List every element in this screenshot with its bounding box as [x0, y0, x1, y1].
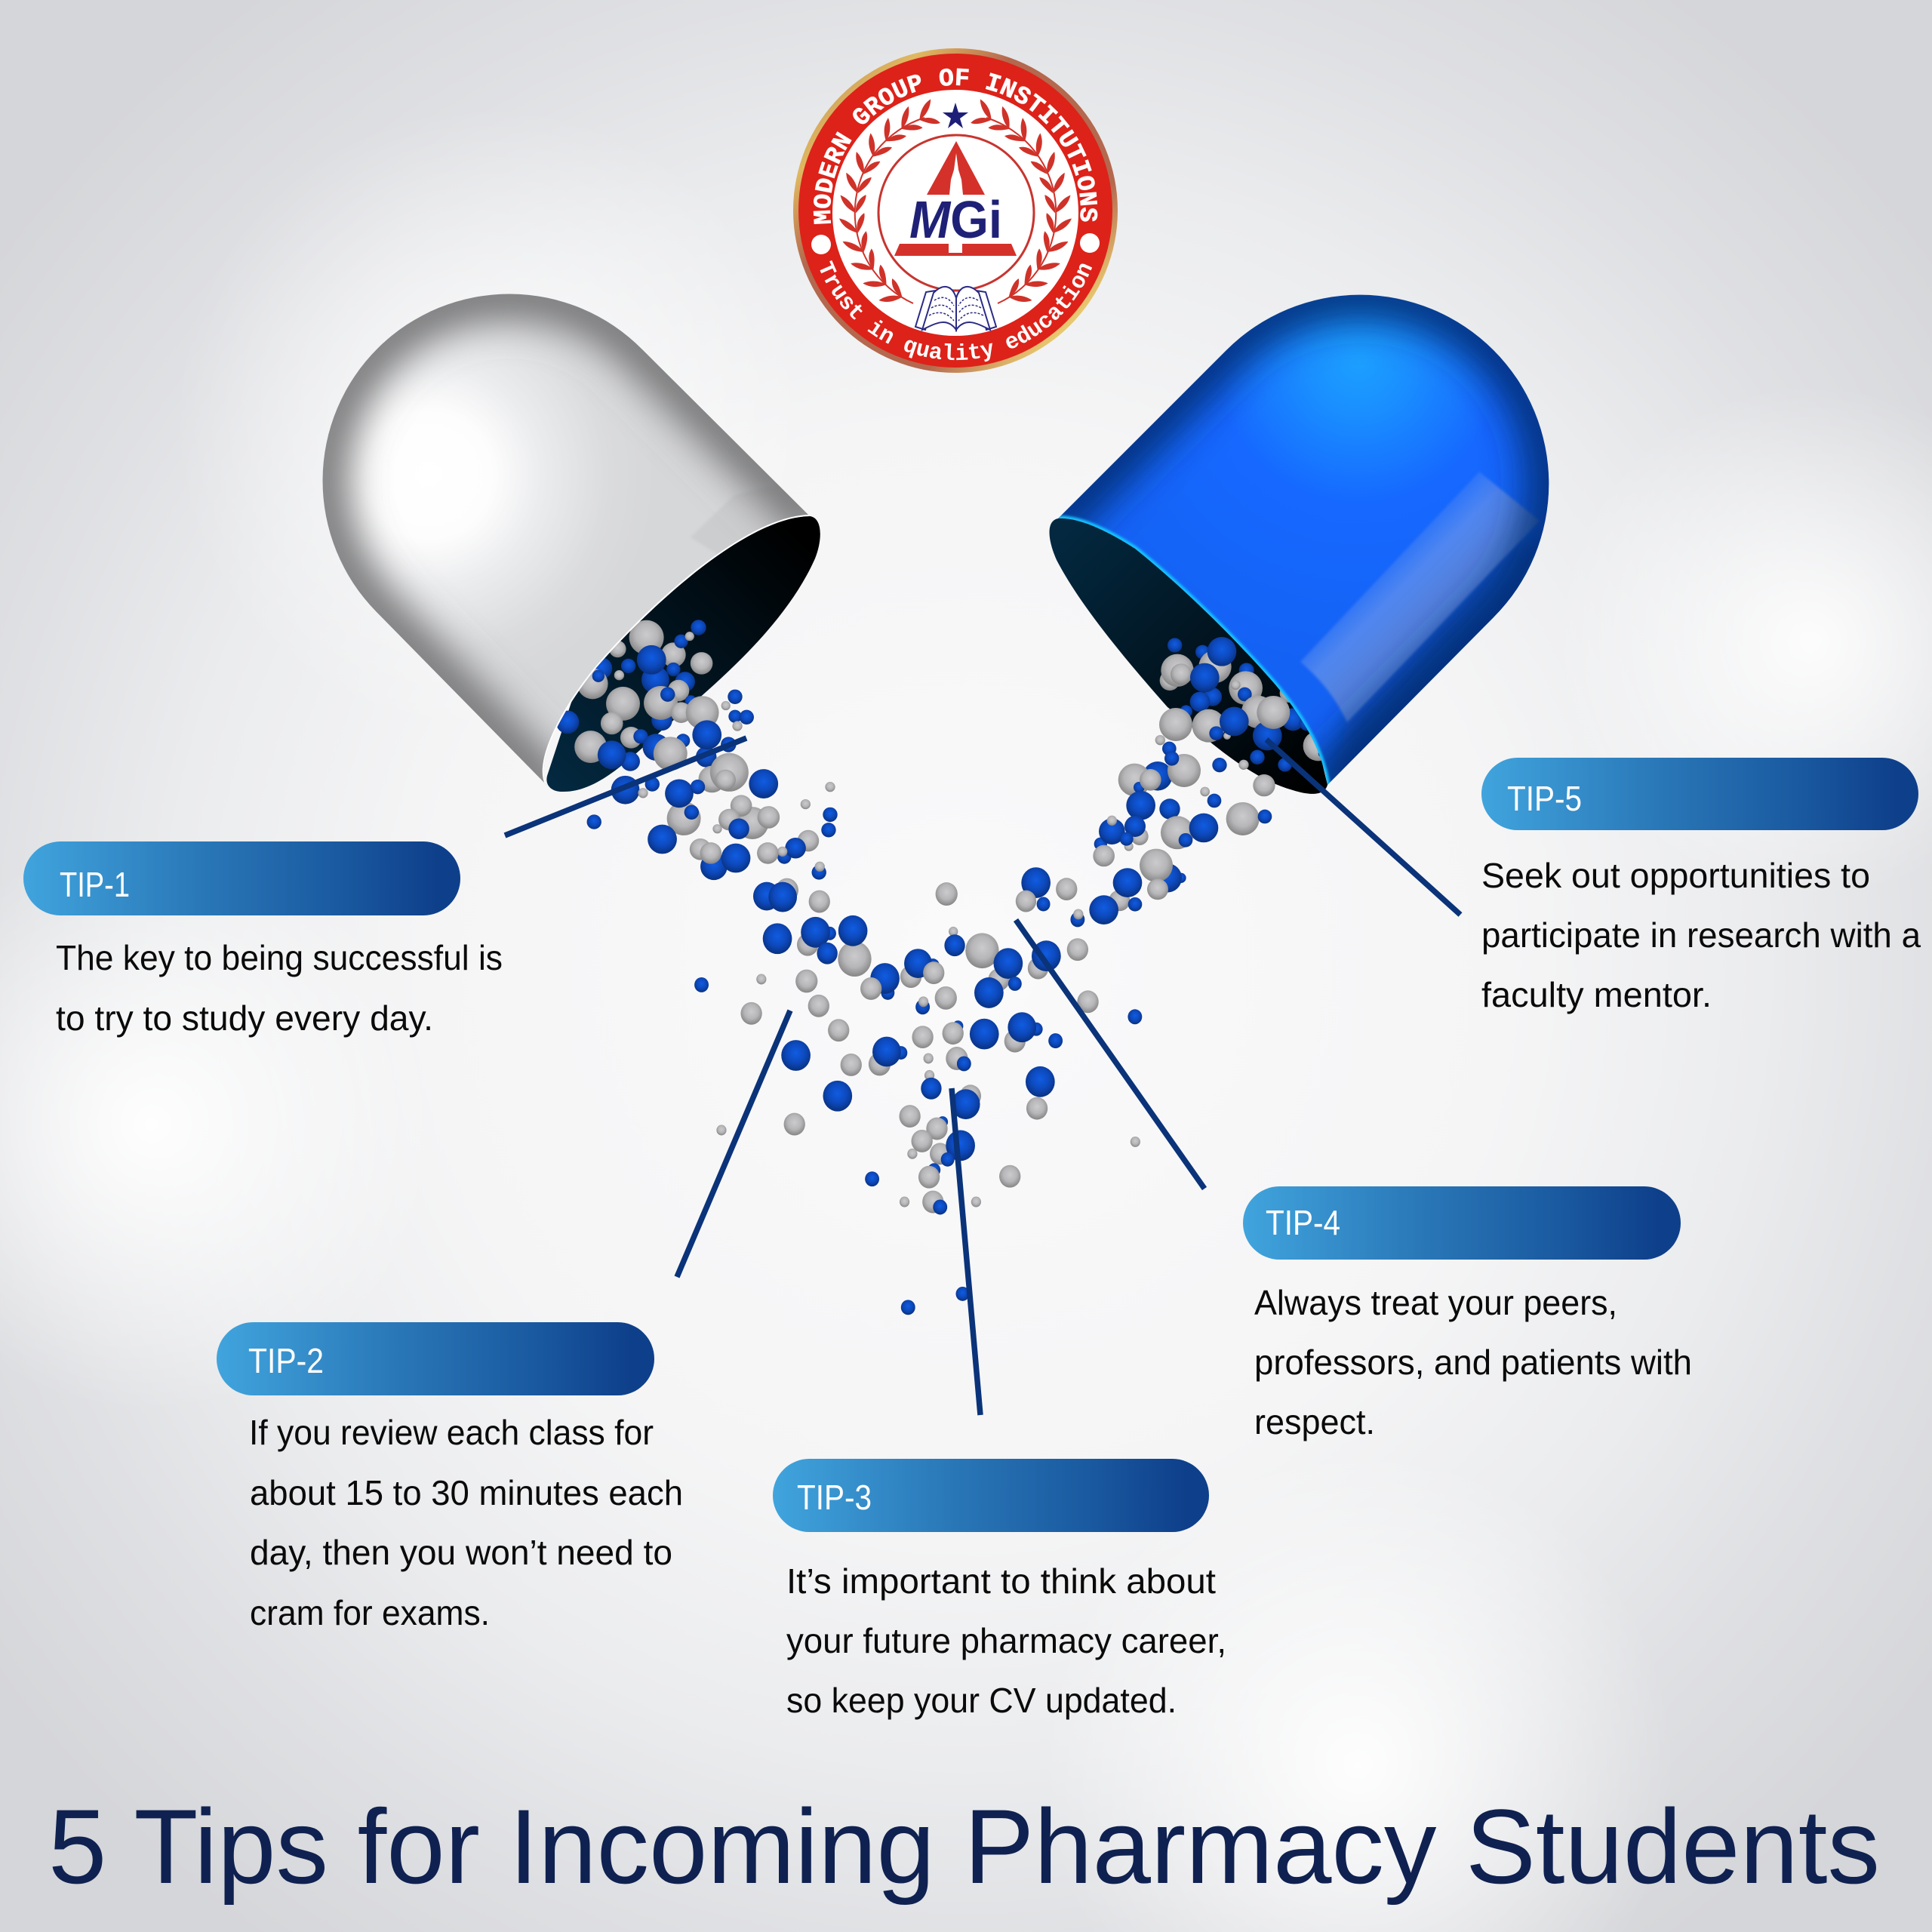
central sphere cloud	[694, 867, 1142, 1315]
logo inner circle	[878, 135, 1034, 291]
tip 5 text: participate in research with a	[1481, 915, 1921, 955]
tip 5 label: TIP-5	[1507, 779, 1582, 818]
connector line: tip 4	[1016, 920, 1204, 1189]
tip 2 text: If you review each class for	[249, 1413, 654, 1452]
blue capsule shell	[1045, 295, 1562, 800]
logo laurel wreath	[839, 99, 1072, 310]
tip 3	[773, 1459, 1226, 1720]
tip 1 label: TIP-1	[60, 865, 130, 904]
logo top lettering: MODERN GROUP OF INSTITUTIONS	[814, 68, 1097, 224]
logo tower base	[949, 242, 962, 253]
tip 1 text	[56, 938, 503, 1038]
title: 5 Tips for Incoming Pharmacy Students	[48, 1787, 1880, 1906]
tip 3 text: your future pharmacy career,	[786, 1621, 1226, 1660]
tip 2 label: TIP-2	[248, 1341, 324, 1380]
logo initials: MGi	[909, 190, 1002, 249]
tip 2 text: day, then you won’t need to	[250, 1533, 672, 1572]
logo open book	[915, 287, 996, 330]
tip 1	[23, 841, 503, 1038]
logo red band	[798, 54, 1112, 368]
blue capsule opening	[1049, 513, 1327, 794]
connector line: tip 3	[952, 1088, 980, 1415]
tip 2	[217, 1322, 683, 1632]
tip 5 text: faculty mentor.	[1481, 975, 1712, 1014]
tip 2 text: cram for exams.	[250, 1593, 490, 1632]
logo minaret cutout	[949, 153, 963, 195]
tip 4 text: respect.	[1254, 1402, 1375, 1441]
spheres spilling from silver capsule	[556, 620, 838, 880]
spheres spilling from blue capsule	[1089, 637, 1334, 924]
logo outer ring	[793, 48, 1118, 373]
capsule: blue half	[1045, 295, 1562, 924]
tip 3 text: It’s important to think about	[786, 1561, 1216, 1601]
tip 4 text: Always treat your peers,	[1254, 1283, 1617, 1322]
logo bottom lettering: Trust in quality education	[820, 260, 1093, 362]
tip 3 text: so keep your CV updated.	[786, 1681, 1177, 1720]
silver capsule shell	[323, 294, 823, 800]
connector line: tip 2	[677, 1011, 790, 1277]
logo dots	[811, 233, 1100, 254]
tip 5	[1481, 758, 1921, 1014]
tip 5 text	[1481, 856, 1921, 1014]
tip 2 text: about 15 to 30 minutes each	[250, 1473, 683, 1512]
tip 3 text	[786, 1561, 1226, 1720]
logo: MGI seal	[793, 48, 1118, 373]
tip 4	[1243, 1186, 1692, 1441]
connector line: tip 5	[1266, 740, 1460, 915]
logo base bar	[894, 244, 1017, 256]
logo white field	[832, 90, 1078, 336]
tip 5 pill	[1481, 758, 1918, 830]
tip 1 pill	[23, 841, 460, 915]
tip 5 text: Seek out opportunities to	[1481, 856, 1870, 895]
silver capsule opening	[546, 483, 820, 792]
tip 3 pill	[773, 1459, 1209, 1532]
logo triangle emblem	[927, 141, 985, 195]
connector line: tip 1	[505, 738, 746, 835]
tip 4 pill	[1243, 1186, 1681, 1260]
tip 1 text: The key to being successful is	[56, 938, 503, 977]
tip 4 label: TIP-4	[1266, 1203, 1340, 1242]
tip 4 text	[1254, 1283, 1692, 1441]
capsule: silver half	[323, 294, 838, 880]
tip 2 pill	[217, 1322, 654, 1395]
tip 3 label: TIP-3	[797, 1478, 872, 1517]
tip 1 text: to try to study every day.	[56, 998, 433, 1038]
logo star	[943, 103, 968, 128]
tip 4 text: professors, and patients with	[1254, 1343, 1692, 1382]
tip 2 text	[249, 1413, 683, 1632]
